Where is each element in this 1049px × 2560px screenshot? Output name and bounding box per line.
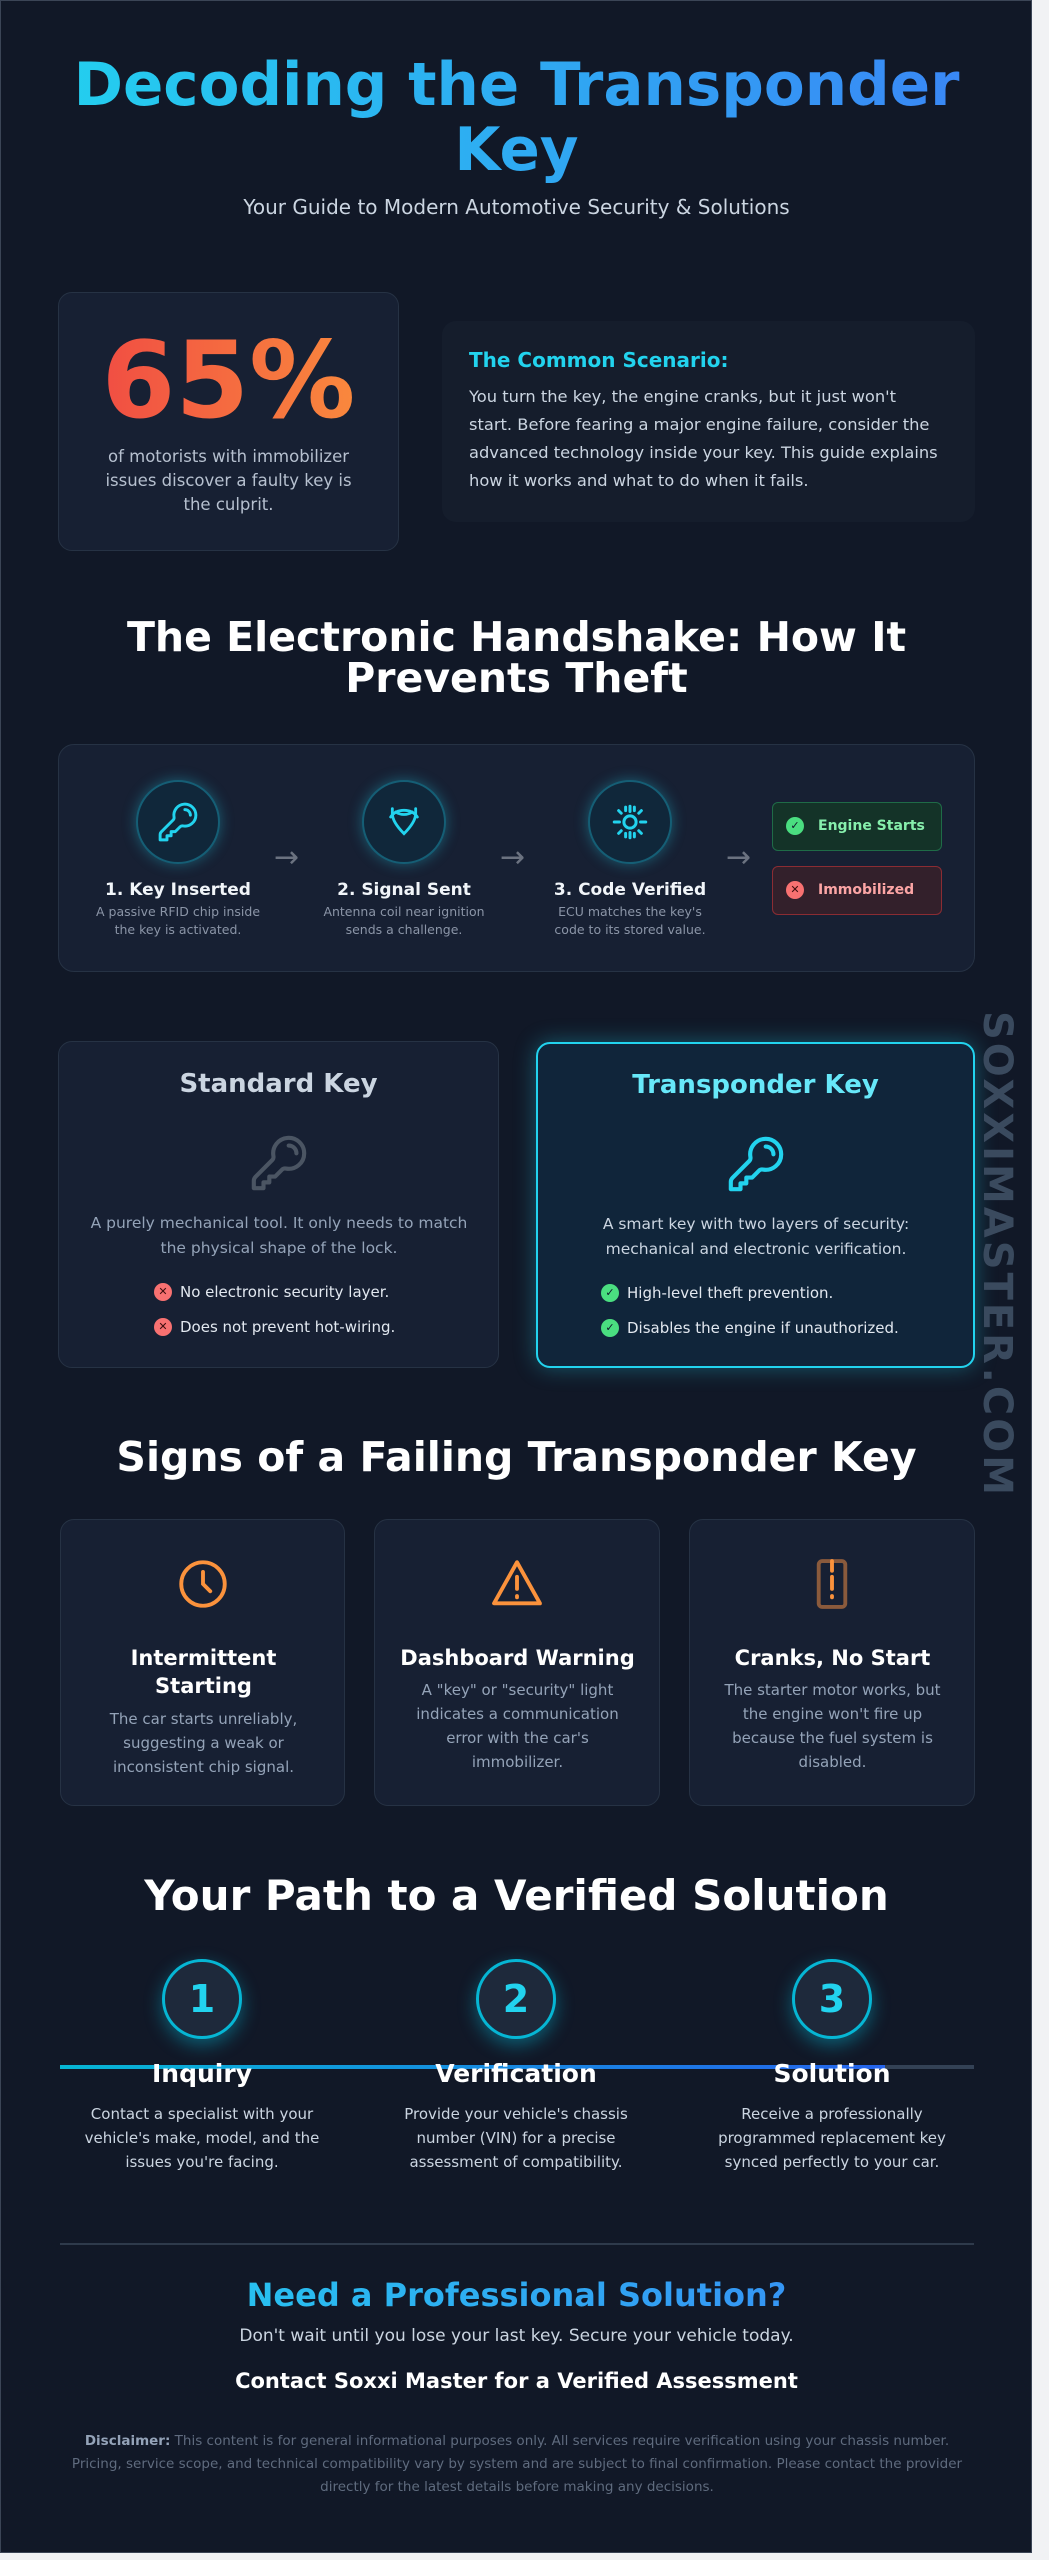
icon: key bbox=[136, 780, 220, 864]
sign title bbox=[131, 1646, 276, 1698]
step number 2 bbox=[476, 1959, 556, 2039]
outcome: immobilized: Immobilized bbox=[818, 882, 914, 898]
step description bbox=[404, 2105, 628, 2171]
step description: vehicle's make, model, and the bbox=[85, 2129, 319, 2147]
step title: Inquiry bbox=[152, 2059, 252, 2088]
outcome: engine starts: ✓ bbox=[790, 819, 800, 832]
panel: common scenario bbox=[442, 321, 975, 522]
icon: code verified bbox=[588, 780, 672, 864]
step 1: inquiry bbox=[85, 1955, 319, 2171]
CTA contact line: Contact Soxxi Master for a Verified Assessment bbox=[235, 2369, 798, 2393]
step 3: solution bbox=[718, 1955, 946, 2171]
outcome: engine starts bbox=[772, 802, 942, 851]
step description: Contact a specialist with your bbox=[91, 2105, 313, 2123]
stat number: 65% bbox=[102, 319, 355, 442]
outcome: immobilized bbox=[772, 866, 942, 915]
sign description bbox=[724, 1681, 941, 1771]
outcome: immobilized: ✕ bbox=[790, 883, 800, 896]
sign description: The starter motor works, but bbox=[724, 1681, 941, 1699]
CTA heading bbox=[1, 2275, 1032, 2315]
step description: Provide your vehicle's chassis bbox=[404, 2105, 628, 2123]
transponder description: A smart key with two layers of security: mechanical and electronic verification. bbox=[603, 1215, 909, 1258]
sign description: immobilizer. bbox=[472, 1753, 563, 1771]
step number 2: 2 bbox=[503, 1977, 529, 2021]
CTA subtext: Don't wait until you lose your last key. Secure your vehicle today. bbox=[239, 2326, 794, 2346]
progress line bbox=[60, 2065, 974, 2069]
icon: gray key bbox=[252, 1136, 306, 1190]
subtitle: Your Guide to Modern Automotive Security & Solutions bbox=[243, 195, 790, 219]
sign description: error with the car's bbox=[446, 1729, 589, 1747]
scenario text: You turn the key, the engine cranks, but it just won't start. Before fearing a major engine failure, consider the advanced technology inside your key. This guide explains how it works and what to do when it fails. bbox=[469, 387, 938, 490]
sign title: Starting bbox=[155, 1674, 252, 1698]
step 3 label: 3. Code Verified bbox=[554, 880, 706, 900]
scenario heading: The Common Scenario: bbox=[469, 348, 728, 372]
stat description: of motorists with immobilizer issues discover a faulty key is the culprit. bbox=[105, 447, 352, 514]
step 2 label: 2. Signal Sent bbox=[337, 880, 471, 900]
title: Key bbox=[454, 116, 579, 185]
panel: handshake flow bbox=[58, 744, 975, 972]
panel: dashboard warning bbox=[374, 1519, 660, 1806]
bullet: disables engine: ✓ bbox=[605, 1320, 615, 1334]
step 1 label: 1. Key Inserted bbox=[105, 880, 251, 900]
step 1 description: A passive RFID chip inside the key is activated. bbox=[96, 904, 260, 937]
title bbox=[1, 53, 1032, 183]
step description: issues you're facing. bbox=[125, 2153, 279, 2171]
bullet: disables engine: Disables the engine if unauthorized. bbox=[627, 1318, 899, 1336]
step title: Verification bbox=[435, 2059, 597, 2088]
sign description: the engine won't fire up bbox=[743, 1705, 922, 1723]
step number 3: 3 bbox=[819, 1977, 845, 2021]
heading: path to solution: Your Path to a Verified Solution bbox=[144, 1871, 889, 1920]
CTA heading: Need a Professional Solution? bbox=[247, 2276, 786, 2314]
standard key description: A purely mechanical tool. It only needs to match the physical shape of the lock. bbox=[91, 1214, 467, 1257]
title: Decoding the Transponder bbox=[74, 51, 959, 120]
step description: programmed replacement key bbox=[718, 2129, 946, 2147]
transponder key title: Transponder Key bbox=[632, 1070, 879, 1100]
text: SOXXIMASTER.COM bbox=[974, 1011, 1020, 1498]
step 2: verification bbox=[404, 1955, 628, 2171]
bullet: no electronic layer: No electronic security layer. bbox=[180, 1282, 389, 1300]
icon: clock bbox=[179, 1560, 227, 1608]
panel: intermittent starting bbox=[60, 1519, 345, 1806]
panel: standard key bbox=[58, 1041, 499, 1368]
outcome: engine starts: Engine Starts bbox=[818, 818, 925, 834]
bullet: theft prevention: High-level theft prevention. bbox=[627, 1284, 833, 1302]
panel: transponder key bbox=[536, 1042, 975, 1368]
sign description bbox=[416, 1681, 619, 1771]
disclaimer bbox=[72, 2433, 962, 2495]
step number 1: 1 bbox=[189, 1977, 215, 2021]
heading: electronic handshake: Prevents Theft bbox=[345, 654, 688, 702]
arrow 3: → bbox=[726, 840, 751, 875]
heading: electronic handshake bbox=[127, 613, 906, 702]
sign description: A "key" or "security" light bbox=[422, 1681, 613, 1699]
step 3 description: ECU matches the key's code to its stored value. bbox=[554, 904, 706, 937]
step number 3 bbox=[792, 1959, 872, 2039]
standard key title: Standard Key bbox=[179, 1069, 378, 1099]
sign title: Dashboard Warning bbox=[400, 1646, 635, 1670]
sign description: because the fuel system is bbox=[732, 1729, 933, 1747]
stat card: 65% bbox=[58, 292, 399, 551]
step description bbox=[718, 2105, 946, 2171]
heading: signs: Signs of a Failing Transponder Key bbox=[116, 1433, 917, 1481]
step title: Solution bbox=[773, 2059, 891, 2088]
sign description bbox=[110, 1710, 297, 1776]
bullet: hot-wiring: ✕ bbox=[158, 1320, 168, 1332]
icon: signal bbox=[362, 780, 446, 864]
sign description: inconsistent chip signal. bbox=[113, 1758, 294, 1776]
arrow 2: → bbox=[500, 840, 525, 875]
sign description: suggesting a weak or bbox=[123, 1734, 284, 1752]
panel: cranks no start bbox=[689, 1519, 975, 1806]
icon: cyan key bbox=[728, 1136, 784, 1192]
icon: warning triangle bbox=[492, 1560, 542, 1606]
bullet: theft prevention: ✓ bbox=[605, 1286, 615, 1298]
sign description: indicates a communication bbox=[416, 1705, 619, 1723]
sign title: Intermittent bbox=[131, 1646, 276, 1670]
arrow 1: → bbox=[274, 840, 299, 875]
disclaimer: Pricing, service scope, and technical compatibility vary by system and are subject to final confirmation. Please contact the provider directly for the latest details before making any decisions. bbox=[72, 2456, 962, 2495]
step description: Receive a professionally bbox=[741, 2105, 923, 2123]
sign title: Cranks, No Start bbox=[735, 1646, 930, 1670]
step number 1 bbox=[162, 1959, 242, 2039]
icon: battery alert bbox=[816, 1559, 848, 1609]
sign description: The car starts unreliably, bbox=[110, 1710, 297, 1728]
bullet: hot-wiring: Does not prevent hot-wiring. bbox=[180, 1318, 395, 1336]
sign description: disabled. bbox=[799, 1753, 866, 1771]
bullet: no electronic layer: ✕ bbox=[158, 1284, 168, 1298]
step description bbox=[85, 2105, 319, 2171]
step description: number (VIN) for a precise bbox=[416, 2129, 616, 2147]
step description: assessment of compatibility. bbox=[409, 2153, 623, 2171]
step 2 description: Antenna coil near ignition sends a challenge. bbox=[323, 904, 485, 937]
step description: synced perfectly to your car. bbox=[725, 2153, 939, 2171]
disclaimer: Disclaimer: This content is for general informational purposes only. All services require verification using your chassis number. bbox=[85, 2433, 949, 2449]
heading: electronic handshake: The Electronic Handshake: How It bbox=[127, 613, 906, 661]
